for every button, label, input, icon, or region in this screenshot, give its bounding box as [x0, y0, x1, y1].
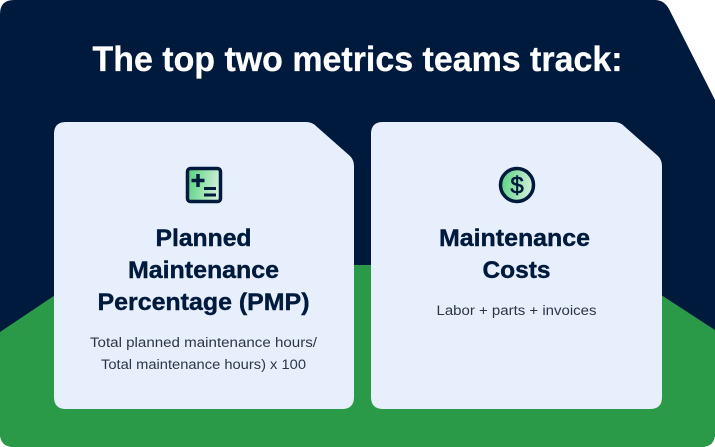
heading: planned maintenance percentage: Maintenance [128, 257, 279, 284]
green lower background band [0, 265, 715, 447]
title: The top two metrics teams track: [92, 39, 622, 79]
heading: planned maintenance percentage: Planned [156, 225, 252, 252]
heading: maintenance costs: Costs [482, 257, 550, 284]
panel: planned maintenance percentage [54, 122, 354, 409]
formula text: Total maintenance hours) x 100 [101, 357, 306, 372]
formula text: Total planned maintenance hours/ [90, 335, 317, 350]
cost formula text: Labor + parts + invoices [436, 303, 597, 318]
icon: dollar coin: $ [510, 172, 524, 200]
panel: maintenance costs [371, 122, 662, 409]
heading: planned maintenance percentage: Percentage (PMP) [98, 289, 310, 316]
card background left [54, 122, 354, 409]
heading: maintenance costs: Maintenance [439, 225, 590, 252]
icon: dollar coin [500, 168, 534, 202]
card background right [371, 122, 662, 409]
icon: calculator plus and equals [188, 168, 220, 202]
